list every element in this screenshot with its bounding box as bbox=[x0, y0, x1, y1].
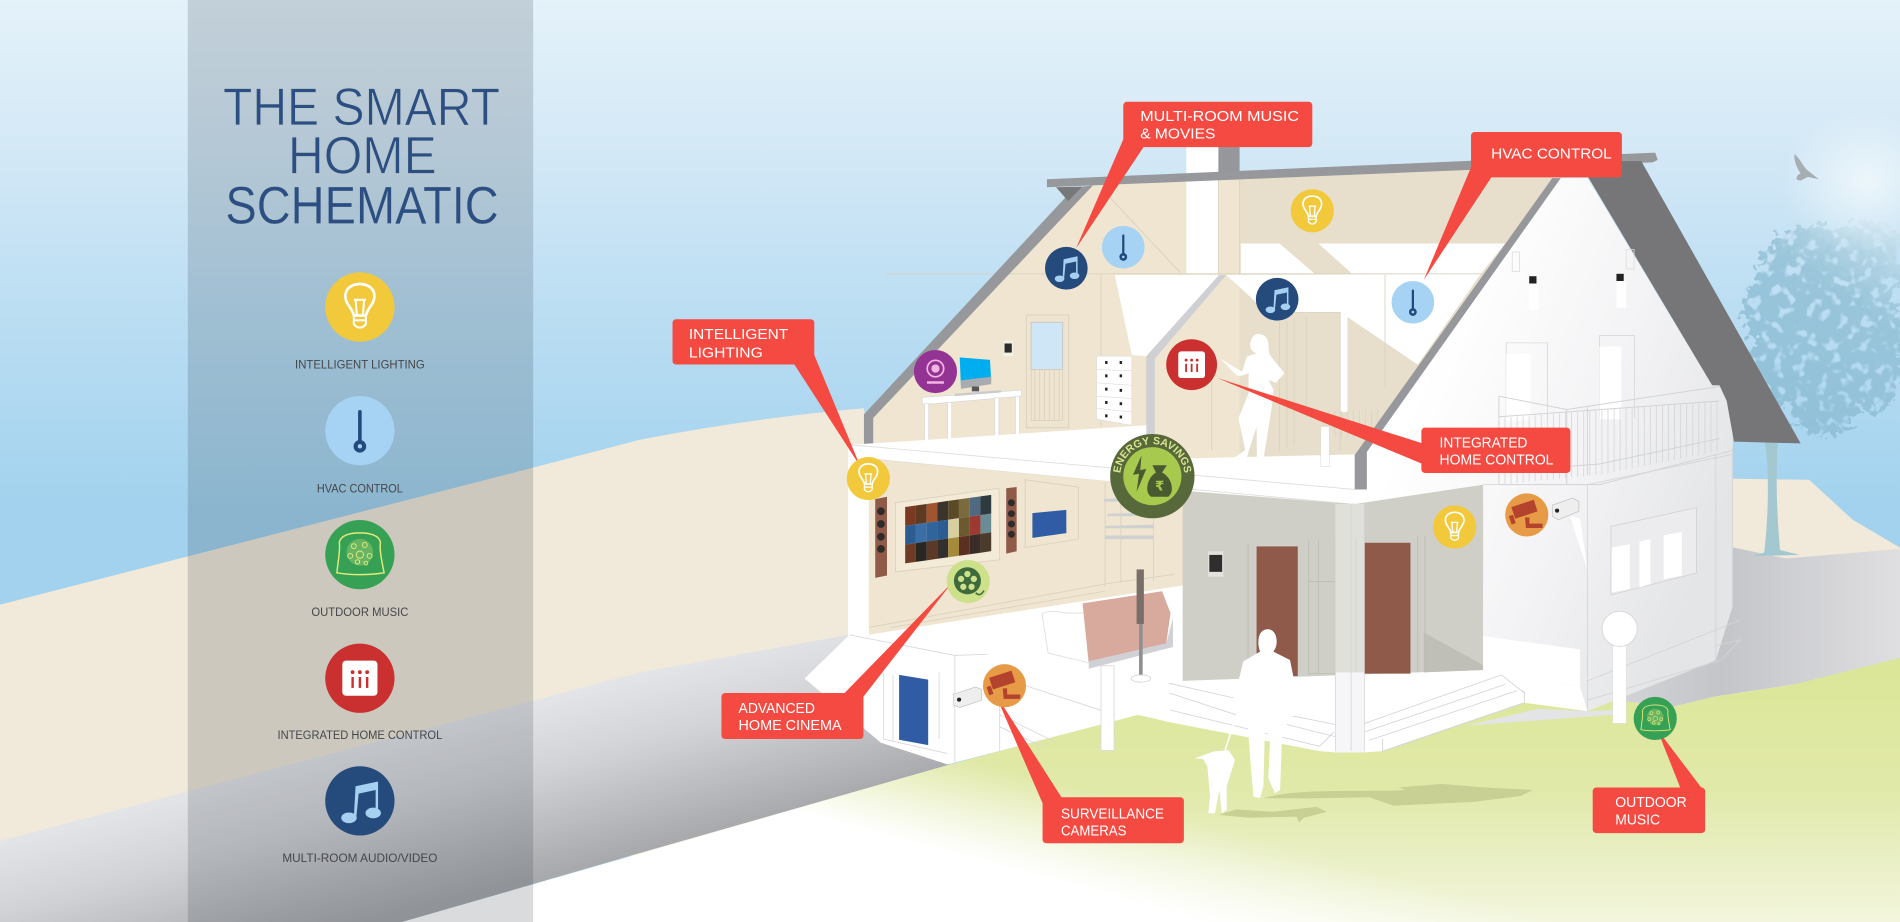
icon: hvac room 1 bbox=[1102, 226, 1145, 268]
left roof band bbox=[864, 185, 1093, 445]
callout: multi-room music bbox=[1123, 102, 1312, 147]
upper left door and window bbox=[1026, 315, 1069, 428]
sofa bbox=[1042, 591, 1173, 669]
icon: webcam bbox=[914, 350, 957, 393]
legend: outdoor music: OUTDOOR MUSIC bbox=[311, 606, 408, 619]
wing windows bbox=[1611, 508, 1696, 595]
white front gable bbox=[1355, 178, 1733, 711]
side wing bbox=[1483, 448, 1740, 711]
icon: camera left bbox=[983, 664, 1026, 707]
title bbox=[223, 78, 500, 236]
pointer: integrated bbox=[1217, 378, 1423, 464]
roof ridge bbox=[1047, 153, 1658, 187]
right speaker bbox=[1006, 487, 1017, 554]
callout: intelligent lighting: INTELLIGENT bbox=[689, 327, 788, 343]
callout: multi-room music: MULTI-ROOM MUSIC bbox=[1140, 109, 1299, 125]
pointer: intelligent lighting bbox=[794, 355, 860, 466]
man shadow bbox=[1263, 784, 1533, 806]
ceiling light patches bbox=[1115, 244, 1505, 412]
lawn bbox=[402, 658, 1900, 922]
callout: advanced home cinema: HOME CINEMA bbox=[739, 718, 842, 734]
callouts bbox=[673, 102, 1705, 843]
inner partition wall bbox=[1146, 275, 1226, 436]
callout: integrated home control bbox=[1421, 428, 1570, 473]
callout: surveillance cameras bbox=[1043, 797, 1184, 843]
icon: bird bbox=[1794, 154, 1819, 181]
entry pillar bbox=[1335, 502, 1364, 752]
floor speaker bbox=[1131, 569, 1151, 682]
legend: multi-room audio video: MULTI-ROOM AUDIO/VIDEO bbox=[282, 852, 437, 865]
balcony railing bbox=[1499, 386, 1732, 485]
dog silhouette bbox=[1195, 750, 1235, 813]
gable vents bbox=[1512, 250, 1634, 310]
upper windows bbox=[1506, 336, 1635, 420]
icon: camera right bbox=[1505, 493, 1548, 536]
callout: advanced home cinema: ADVANCED bbox=[739, 701, 815, 717]
map icons bbox=[846, 189, 1677, 740]
pointer: outdoor bbox=[1657, 729, 1705, 792]
callout: advanced home cinema bbox=[721, 693, 863, 739]
attic back wall bbox=[872, 164, 1561, 485]
callout: hvac control bbox=[1471, 132, 1622, 177]
pointer: multi-room bbox=[1076, 139, 1144, 248]
legend: intelligent lighting bbox=[295, 272, 425, 371]
basement blue window bbox=[899, 675, 928, 745]
leash bbox=[1225, 710, 1238, 750]
icon: music room 2 bbox=[1256, 278, 1298, 321]
entrance door left bbox=[1257, 546, 1298, 676]
callout: hvac control: HVAC CONTROL bbox=[1491, 147, 1612, 163]
white backing bbox=[848, 445, 1483, 691]
dark side roof bbox=[1588, 161, 1801, 443]
energy savings badge: ENERGY SAVINGS bbox=[1113, 436, 1192, 473]
left speaker bbox=[875, 497, 887, 578]
callout: surveillance cameras: SURVEILLANCE bbox=[1061, 806, 1164, 822]
white column bbox=[848, 457, 869, 636]
sand hill left bbox=[0, 408, 921, 872]
callout: intelligent lighting: LIGHTING bbox=[689, 345, 763, 361]
callout: integrated home control: HOME CONTROL bbox=[1440, 453, 1553, 469]
icon: home control bbox=[1166, 339, 1217, 390]
pointer tails bbox=[794, 139, 1705, 803]
garden lamp bbox=[1602, 611, 1637, 723]
sand hill right bbox=[1727, 479, 1900, 569]
entrance door right bbox=[1364, 543, 1410, 674]
left legend panel bbox=[188, 0, 533, 922]
drawer unit bbox=[1097, 356, 1145, 428]
desk with monitor bbox=[922, 357, 1021, 445]
road right bbox=[1575, 548, 1900, 727]
front roof band bbox=[1355, 178, 1561, 489]
chimney bbox=[1186, 143, 1240, 274]
legend: outdoor music bbox=[311, 520, 408, 619]
legend: integrated home control bbox=[277, 644, 443, 742]
pointer: cinema bbox=[843, 583, 952, 697]
home cinema screen bbox=[895, 488, 1000, 572]
stair treads bbox=[1104, 498, 1154, 539]
dog shadow bbox=[1218, 807, 1327, 823]
house bbox=[805, 143, 1801, 823]
attic back wall right section bbox=[1240, 164, 1561, 458]
woman silhouette bbox=[1220, 334, 1284, 460]
legend: intelligent lighting: INTELLIGENT LIGHTING bbox=[295, 358, 425, 371]
legend: hvac control: HVAC CONTROL bbox=[317, 483, 403, 496]
icon: film reel bbox=[947, 560, 990, 603]
security camera left bbox=[954, 687, 982, 708]
white foreground bbox=[402, 678, 1900, 922]
ground floor room bbox=[868, 459, 1185, 635]
energy savings badge bbox=[1110, 434, 1195, 518]
pointer: surveillance bbox=[995, 693, 1062, 803]
security camera right bbox=[1552, 498, 1587, 569]
legend: multi-room audio video bbox=[282, 766, 437, 865]
wing white band bbox=[1483, 636, 1580, 686]
man silhouette bbox=[1235, 629, 1296, 798]
tree bbox=[1740, 109, 1900, 556]
callout: outdoor music: OUTDOOR bbox=[1615, 795, 1687, 811]
blue wall panel bbox=[1025, 480, 1078, 548]
grey entrance recess bbox=[1183, 485, 1483, 681]
icon: attic bulb bbox=[1291, 189, 1334, 232]
title: HOME bbox=[288, 126, 437, 185]
left basement block bbox=[849, 635, 1115, 766]
icon: music room 1 bbox=[1045, 247, 1088, 290]
wall switch entrance bbox=[1208, 551, 1223, 577]
callout: intelligent lighting bbox=[673, 319, 814, 365]
ground shadow wedge bbox=[1465, 709, 1613, 726]
eave shadow bbox=[1056, 187, 1082, 201]
ground floor bbox=[805, 582, 1524, 764]
wall switch bbox=[1003, 340, 1013, 356]
title: THE SMART bbox=[223, 78, 500, 137]
title: SCHEMATIC bbox=[225, 177, 499, 236]
icon: hvac room 2 bbox=[1392, 281, 1434, 324]
callout: surveillance cameras: CAMERAS bbox=[1061, 823, 1126, 839]
icon: lighting right bbox=[1433, 505, 1476, 549]
pointer: hvac bbox=[1424, 167, 1492, 280]
legend: hvac control bbox=[317, 396, 403, 496]
callout: outdoor music: MUSIC bbox=[1615, 812, 1660, 828]
icon: outdoor speaker bbox=[1634, 697, 1677, 740]
road left bbox=[0, 630, 969, 922]
legend: integrated home control: INTEGRATED HOME CONTROL bbox=[277, 729, 443, 742]
energy savings badge: ₹ bbox=[1155, 480, 1164, 495]
callout: multi-room music: & MOVIES bbox=[1140, 127, 1215, 143]
upper floor slab bbox=[848, 425, 1355, 506]
steps bbox=[1169, 675, 1524, 751]
entrance wall lines bbox=[1248, 536, 1425, 678]
callout: integrated home control: INTEGRATED bbox=[1440, 436, 1528, 452]
callout: outdoor music bbox=[1593, 788, 1705, 833]
wing base block bbox=[1483, 670, 1588, 711]
balcony rail behind bbox=[1321, 410, 1380, 466]
icon: lighting left bbox=[847, 457, 890, 500]
